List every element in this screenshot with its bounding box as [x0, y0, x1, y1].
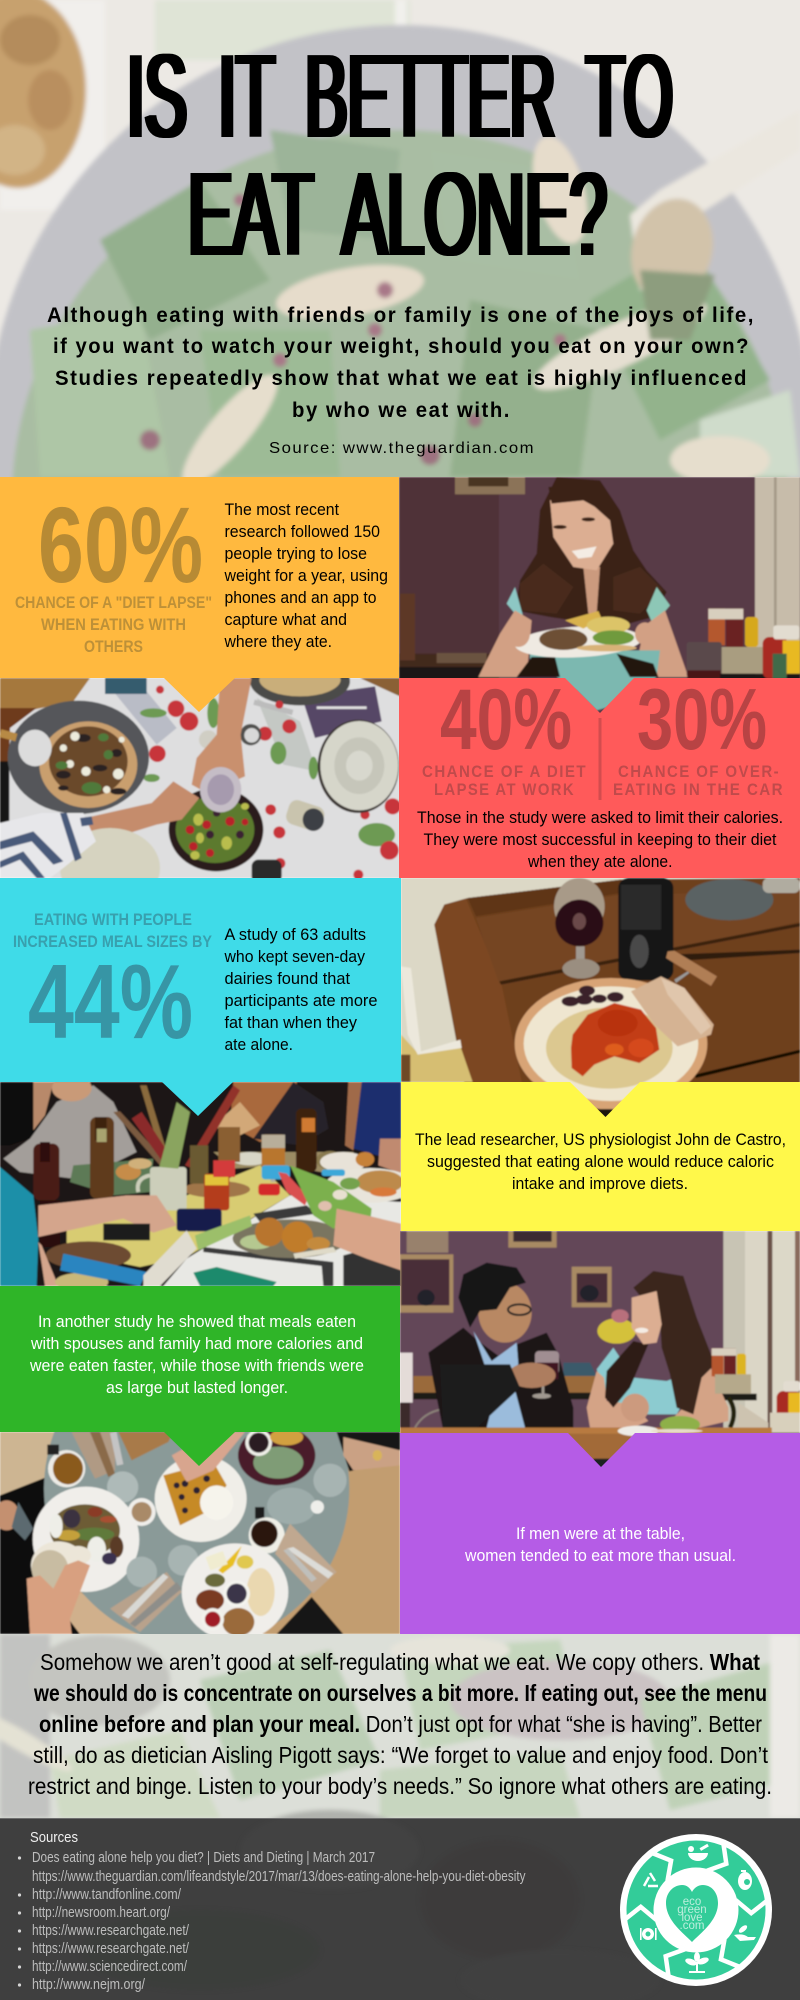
source links	[32, 1850, 526, 1993]
panel background with pointer	[0, 878, 401, 1116]
caption: meal sizes: EATING WITH PEOPLE	[34, 910, 192, 929]
photo: breakfast table from above	[0, 1432, 400, 1634]
icon: mortar and leaf	[688, 1844, 709, 1861]
body text: dairies found that	[224, 969, 350, 988]
panel: 60 percent	[0, 477, 399, 712]
body text: with spouses and family had more calories and	[30, 1334, 363, 1353]
panel background with notch	[399, 678, 800, 878]
photo: pasta and wine on wood table	[401, 878, 800, 1119]
caption: diet lapse	[15, 593, 212, 656]
list bullets	[18, 1856, 21, 1987]
photo: pizza table from above	[0, 678, 399, 878]
body text: people trying to lose	[224, 544, 367, 563]
source line: Source: www.theguardian.com	[269, 440, 535, 457]
body text: intake and improve diets.	[512, 1174, 688, 1193]
body text	[224, 500, 388, 651]
logo heart	[666, 1885, 718, 1942]
body text: research followed 150	[224, 522, 380, 541]
panel background with notch	[400, 1433, 800, 1634]
body text	[415, 1130, 786, 1193]
caption: in the car	[613, 762, 784, 799]
icon: plate and cutlery	[640, 1928, 657, 1940]
body text: when they ate alone.	[527, 852, 672, 871]
panel background with pointer	[0, 1286, 400, 1466]
body text: capture what and	[224, 610, 347, 629]
body text	[29, 1312, 364, 1397]
background photo: salad lower band	[0, 1634, 800, 1818]
title	[127, 30, 673, 281]
intro paragraph: Studies repeatedly show that what we eat is highly influenced	[55, 367, 748, 390]
big number 40%: 40%	[440, 672, 572, 768]
intro paragraph: by who we eat with.	[292, 399, 511, 422]
body text: where they ate.	[224, 632, 332, 651]
big number 60%: 60%	[38, 484, 203, 605]
body text: A study of 63 adults	[224, 925, 366, 944]
source links: Does eating alone help you diet? | Diets and Dieting | March 2017	[32, 1850, 375, 1866]
divider	[598, 718, 602, 800]
closing paragraph: online before and plan your meal. Don’t just opt for what “she is having”. Better	[39, 1711, 762, 1737]
icon: hand with leaf	[734, 1924, 756, 1941]
body text: The most recent	[224, 500, 339, 519]
body text: as large but lasted longer.	[106, 1378, 288, 1397]
intro paragraph: Although eating with friends or family is one of the joys of life,	[47, 304, 755, 327]
logo wordmark	[677, 1896, 707, 1932]
caption: in the car: EATING IN THE CAR	[613, 780, 784, 799]
caption: at work: LAPSE AT WORK	[434, 780, 575, 799]
body text: participants ate more	[224, 991, 378, 1010]
body text	[417, 808, 783, 871]
sources list	[18, 1829, 526, 1993]
source links: http://www.sciencedirect.com/	[32, 1959, 188, 1975]
intro paragraph: if you want to watch your weight, should you eat on your own?	[53, 335, 750, 358]
caption: at work	[422, 762, 587, 799]
logo wordmark: eco	[683, 1896, 701, 1908]
closing paragraph: Somehow we aren’t good at self-regulating what we eat. We copy others. What	[40, 1649, 760, 1675]
icon: recycle	[644, 1873, 658, 1886]
logo wordmark: green	[677, 1904, 707, 1916]
source links: http://newsroom.heart.org/	[32, 1905, 171, 1921]
icon: apple	[738, 1870, 752, 1890]
body text: women tended to eat more than usual.	[464, 1546, 736, 1565]
body text: phones and an app to	[224, 588, 376, 607]
panel: men at the table	[400, 1433, 800, 1634]
body text: They were most successful in keeping to their diet	[424, 830, 777, 849]
photo: couple at dinner	[400, 1231, 800, 1469]
body text: were eaten faster, while those with friends were	[29, 1356, 364, 1375]
body text: who kept seven-day	[224, 947, 365, 966]
source links: https://www.researchgate.net/	[32, 1923, 190, 1939]
body text: In another study he showed that meals eaten	[38, 1312, 356, 1331]
source links: http://www.nejm.org/	[32, 1977, 146, 1993]
source links: https://www.theguardian.com/lifeandstyle/2017/mar/13/does-eating-alone-help-you-diet-obesity	[32, 1869, 526, 1885]
photo: woman holding plate	[399, 477, 800, 717]
caption: at work: CHANCE OF A DIET	[422, 762, 587, 781]
icon: sprout	[684, 1952, 710, 1973]
body text: If men were at the table,	[516, 1524, 685, 1543]
panel: 44 percent	[0, 878, 401, 1116]
body text: suggested that eating alone would reduce caloric	[427, 1152, 774, 1171]
big number 44%: 44%	[28, 943, 193, 1061]
caption: meal sizes	[13, 910, 213, 951]
sources heading: Sources	[30, 1829, 78, 1846]
body text	[464, 1524, 736, 1565]
panel: 40 and 30 percent	[399, 672, 800, 878]
body text: weight for a year, using	[224, 566, 388, 585]
photo: group dinner party	[0, 1075, 415, 1291]
caption: diet lapse: WHEN EATING WITH	[41, 615, 186, 634]
intro paragraph	[47, 304, 755, 422]
logo wordmark: love	[681, 1912, 703, 1924]
source links: https://www.researchgate.net/	[32, 1941, 190, 1957]
caption: diet lapse: CHANCE OF A "DIET LAPSE"	[15, 593, 212, 612]
body text: fat than when they	[224, 1013, 357, 1032]
panel background with pointer	[0, 477, 399, 712]
panel background with notch	[401, 1082, 800, 1231]
body text	[224, 925, 378, 1054]
source links: http://www.tandfonline.com/	[32, 1887, 182, 1903]
footer band	[0, 1810, 800, 2000]
background photo: salad bowl	[0, 0, 800, 477]
caption: meal sizes: INCREASED MEAL SIZES BY	[13, 932, 213, 951]
body text: Those in the study were asked to limit their calories.	[417, 808, 783, 827]
caption: in the car: CHANCE OF OVER-	[618, 762, 780, 781]
panel: other study	[0, 1286, 400, 1466]
panel: lead researcher	[401, 1082, 800, 1231]
logo: eco green love	[620, 1834, 772, 1986]
logo wordmark: .com	[680, 1920, 704, 1932]
body text: ate alone.	[224, 1035, 293, 1054]
caption: diet lapse: OTHERS	[84, 637, 143, 656]
closing paragraph	[28, 1649, 772, 1799]
